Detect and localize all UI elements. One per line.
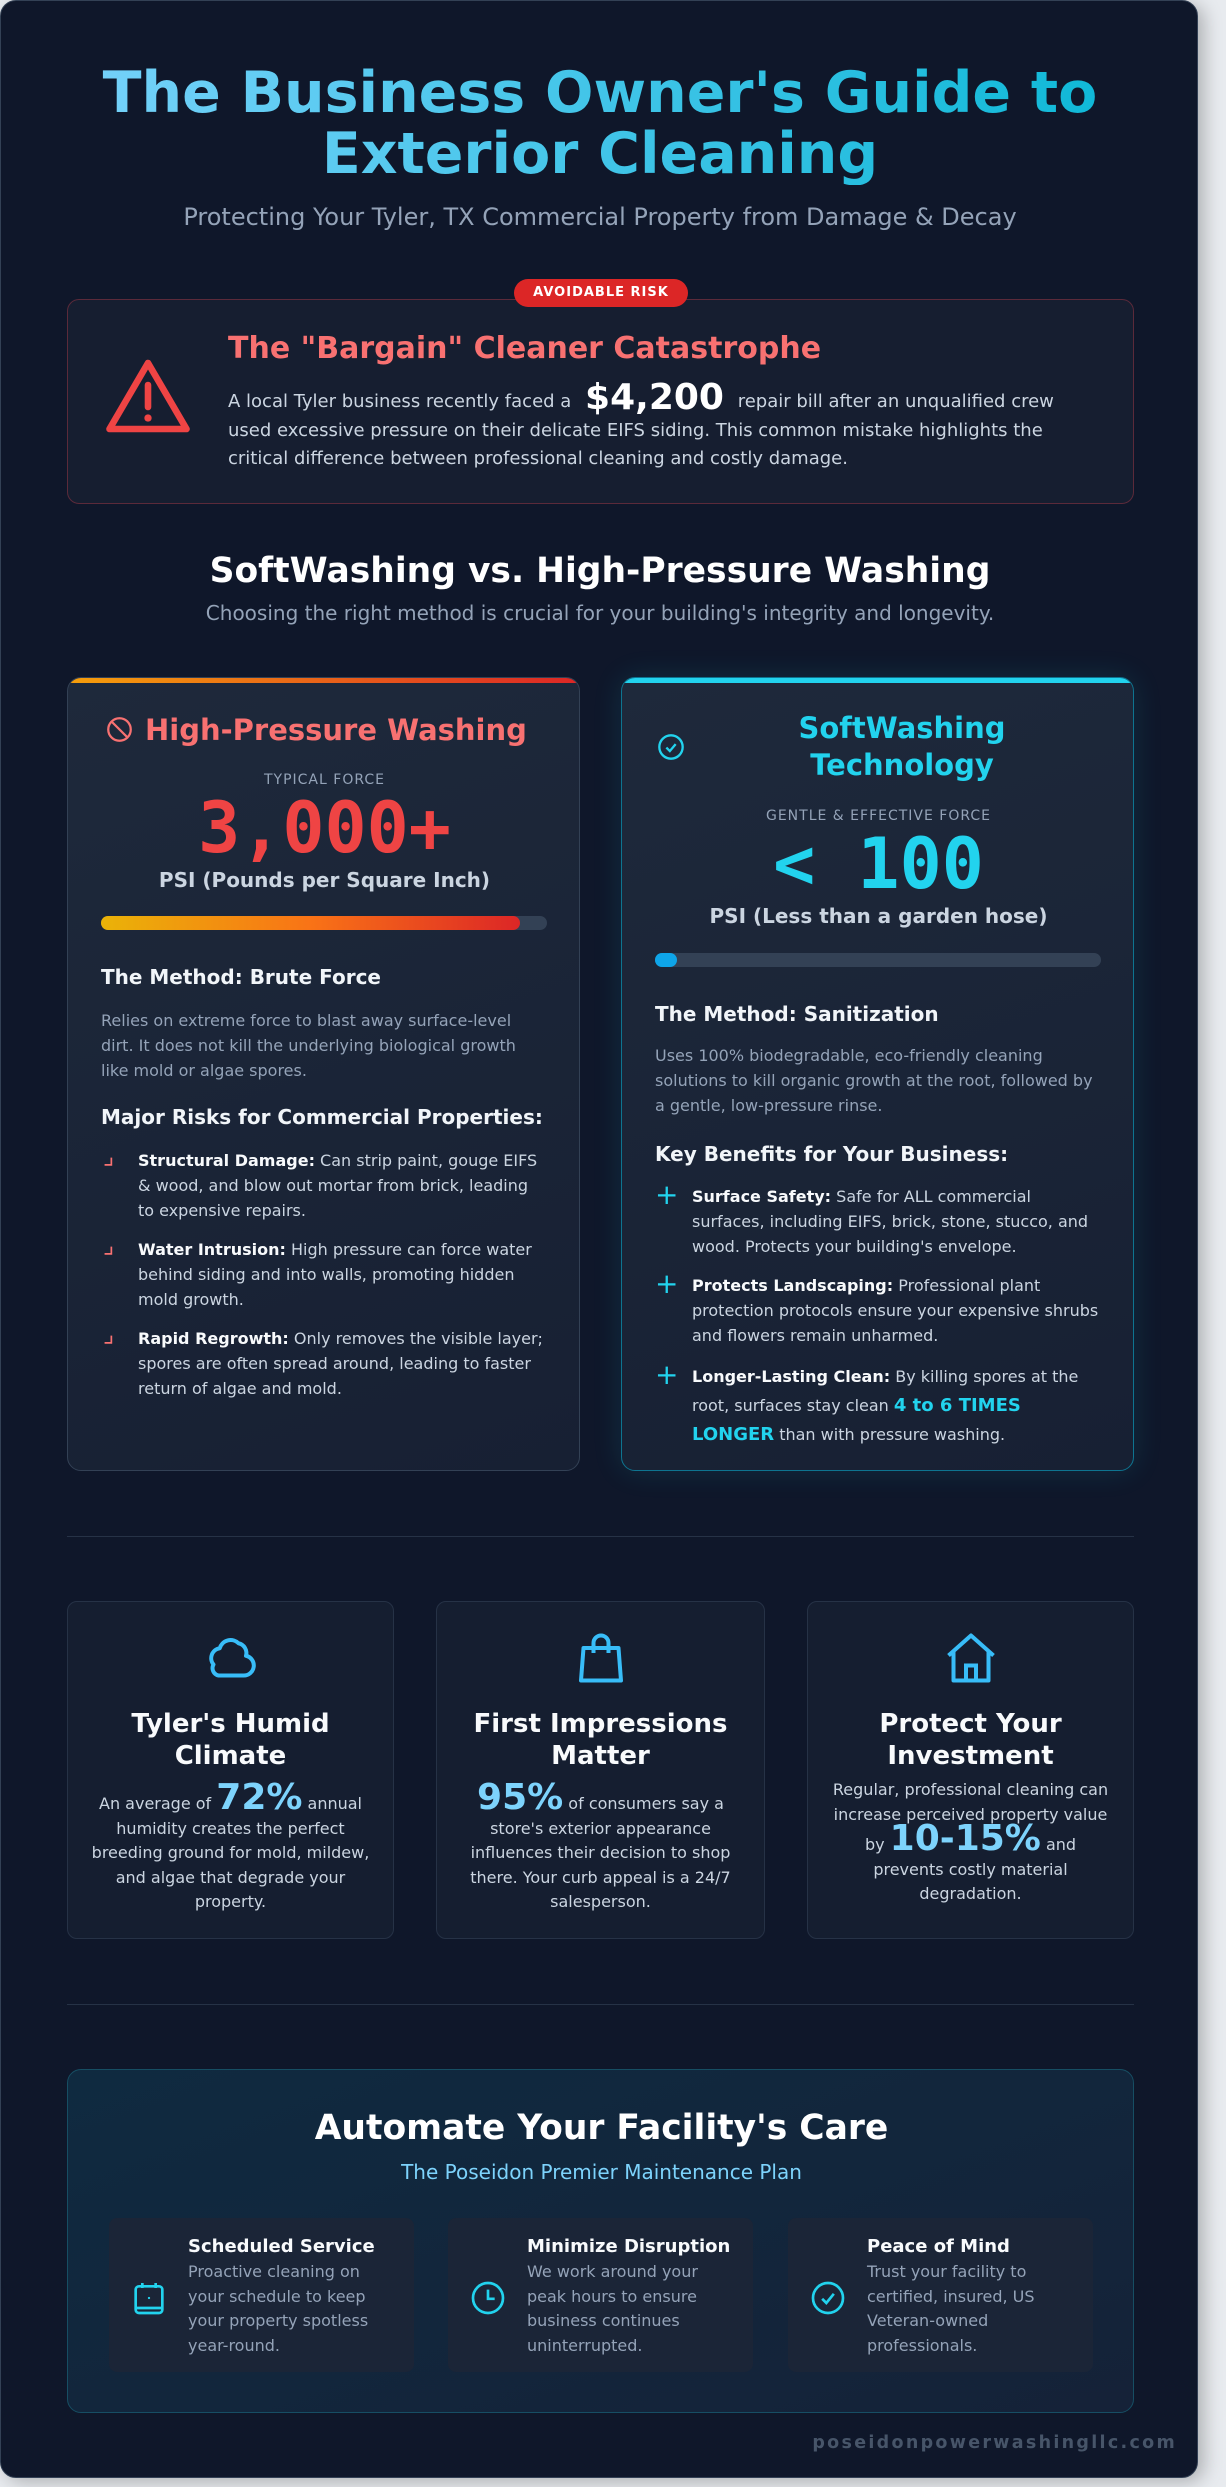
item: minimize disruption: Minimize Disruption — [527, 2236, 730, 2257]
item: scheduled service: Scheduled Service — [188, 2236, 375, 2257]
icon: warning — [106, 360, 190, 432]
panel: humid climate stat: Climate — [175, 1741, 286, 1771]
panel: high-pressure washing: ⌟ — [103, 1231, 114, 1259]
panel: high-pressure washing — [67, 677, 580, 1471]
panel: first impressions stat: First Impressions — [474, 1709, 728, 1739]
title — [1, 63, 1199, 185]
footer url: poseidonpowerwashingllc.com — [812, 2433, 1177, 2453]
alert body: A local Tyler business recently faced a $4,200 repair bill after an unqualified crew used excessive pressure on their delicate EIFS siding. This common mistake highlights the critical difference between professional cleaning and costly damage. — [228, 377, 1054, 469]
icon: calendar — [134, 2283, 164, 2314]
CTA heading: Automate Your Facility's Care — [315, 2108, 888, 2148]
bar — [655, 953, 1101, 967]
alert heading: The "Bargain" Cleaner Catastrophe — [228, 331, 821, 366]
panel: high-pressure washing: Rapid Regrowth: Only removes the visible layer; spores are often spread around, leading to faster return of algae and mold. — [138, 1329, 543, 1398]
force stat: TYPICAL FORCE — [264, 772, 385, 788]
panel: protect investment stat: Protect Your — [879, 1709, 1062, 1739]
panel: protect investment stat: Regular, professional cleaning can increase perceived property value by 10-15% and prevents costly material degradation. — [833, 1780, 1108, 1903]
benefits: Key Benefits for Your Business: — [655, 1142, 1008, 1166]
icon: check circle — [812, 2282, 844, 2314]
item: peace of mind — [788, 2218, 1093, 2372]
panel: automate CTA — [67, 2069, 1134, 2413]
heading: High-Pressure Washing — [145, 713, 527, 747]
panel: high-pressure washing: Relies on extreme force to blast away surface-level dirt. It does not kill the underlying biological growth like mold or algae spores. — [101, 1011, 516, 1080]
title: The Business Owner's Guide to — [103, 60, 1097, 126]
icon: house — [947, 1633, 995, 1682]
badge: avoidable risk: AVOIDABLE RISK — [533, 285, 669, 300]
icon: clock — [472, 2282, 504, 2314]
force stat — [159, 772, 490, 892]
panel: first impressions stat — [436, 1601, 765, 1939]
panel: humid climate stat — [67, 1601, 394, 1939]
panel: high-pressure washing: Structural Damage: Can strip paint, gouge EIFS & wood, and blow out mortar from brick, leading to expensive repairs. — [138, 1151, 537, 1220]
force stat: 3,000+ — [198, 787, 451, 869]
subtitle: Protecting Your Tyler, TX Commercial Property from Damage & Decay — [183, 203, 1017, 231]
icon: cloud — [209, 1638, 256, 1678]
panel: protect investment stat — [807, 1601, 1134, 1939]
force stat: PSI (Pounds per Square Inch) — [159, 868, 490, 892]
panel: bargain cleaner alert — [67, 299, 1134, 504]
panel: softwashing: Uses 100% biodegradable, eco-friendly cleaning solutions to kill organic growth at the root, followed by a gentle, low-pressure rinse. — [655, 1046, 1093, 1115]
method: The Method: Sanitization — [655, 1002, 939, 1026]
icon: check — [658, 734, 684, 760]
section subtitle: Choosing the right method is crucial for your building's integrity and longevity. — [206, 601, 994, 625]
item: scheduled service — [109, 2218, 414, 2372]
title: Exterior Cleaning — [322, 121, 878, 187]
panel: softwashing: + — [655, 1267, 678, 1300]
item: scheduled service: Proactive cleaning on your schedule to keep your property spotless year-round. — [188, 2262, 368, 2354]
panel: softwashing: + — [655, 1178, 678, 1211]
panel: high-pressure washing: ⌟ — [103, 1142, 114, 1170]
force stat — [710, 808, 1048, 928]
panel: softwashing: Surface Safety: Safe for ALL commercial surfaces, including EIFS, brick, stone, stucco, and wood. Protects your building's envelope. — [692, 1187, 1088, 1256]
panel: softwashing: Protects Landscaping: Professional plant protection protocols ensure your expensive shrubs and flowers remain unharmed. — [692, 1276, 1098, 1345]
bar — [101, 916, 547, 930]
heading: SoftWashing Technology — [798, 711, 1006, 782]
panel: high-pressure washing: Water Intrusion: High pressure can force water behind siding and into walls, promoting hidden mold growth. — [138, 1240, 532, 1309]
force stat: GENTLE & EFFECTIVE FORCE — [766, 808, 991, 824]
panel: humid climate stat: An average of 72% annual humidity creates the perfect breeding ground for mold, mildew, and algae that degrade your property. — [92, 1777, 369, 1911]
panel: softwashing: Longer-Lasting Clean: By killing spores at the root, surfaces stay clean 4 to 6 TIMES LONGER than with pressure washing. — [692, 1367, 1078, 1445]
panel: protect investment stat: Investment — [887, 1741, 1054, 1771]
item: peace of mind: Peace of Mind — [867, 2236, 1010, 2257]
item: minimize disruption — [448, 2218, 753, 2372]
item: peace of mind: Trust your facility to certified, insured, US Veteran-owned professionals. — [867, 2262, 1035, 2354]
badge: avoidable risk — [514, 279, 688, 307]
panel: humid climate stat: Tyler's Humid — [131, 1709, 330, 1739]
panel: first impressions stat: 95% of consumers say a store's exterior appearance influences their decision to shop there. Your curb appeal is a 24/7 salesperson. — [470, 1777, 731, 1911]
panel: high-pressure washing: ⌟ — [103, 1320, 114, 1348]
panel: softwashing — [621, 677, 1134, 1471]
force stat: < 100 — [773, 823, 984, 905]
method: The Method: Brute Force — [101, 965, 381, 989]
risks: Major Risks for Commercial Properties: — [101, 1105, 543, 1129]
section heading: SoftWashing vs. High-Pressure Washing — [210, 551, 990, 591]
icon: shopping bag — [579, 1634, 623, 1682]
panel: first impressions stat: Matter — [551, 1741, 650, 1771]
CTA subtitle: The Poseidon Premier Maintenance Plan — [401, 2160, 802, 2184]
panel: softwashing: + — [655, 1358, 678, 1391]
item: minimize disruption: We work around your peak hours to ensure business continues uninterrupted. — [527, 2262, 698, 2354]
force stat: PSI (Less than a garden hose) — [710, 904, 1048, 928]
